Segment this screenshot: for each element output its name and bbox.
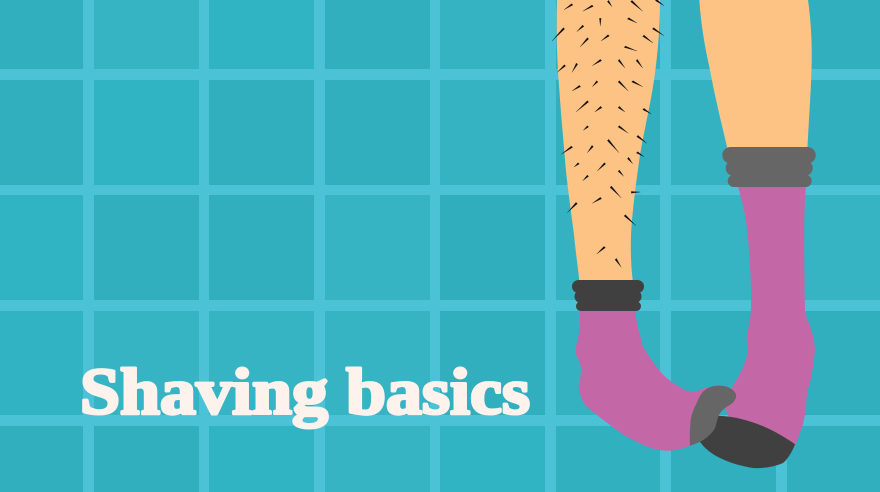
left leg hairs: [552, 0, 664, 267]
left sock: [576, 308, 708, 451]
left sock heel: [690, 386, 736, 446]
right sock cuff: [722, 147, 816, 187]
left leg: hairy: [552, 0, 664, 282]
right sock toe: [700, 416, 795, 468]
left leg skin: [557, 0, 660, 282]
title: Shaving basics: [80, 356, 530, 428]
left sock cuff: [572, 280, 644, 311]
right leg: shaved: [699, 0, 812, 150]
right sock: [722, 185, 815, 446]
